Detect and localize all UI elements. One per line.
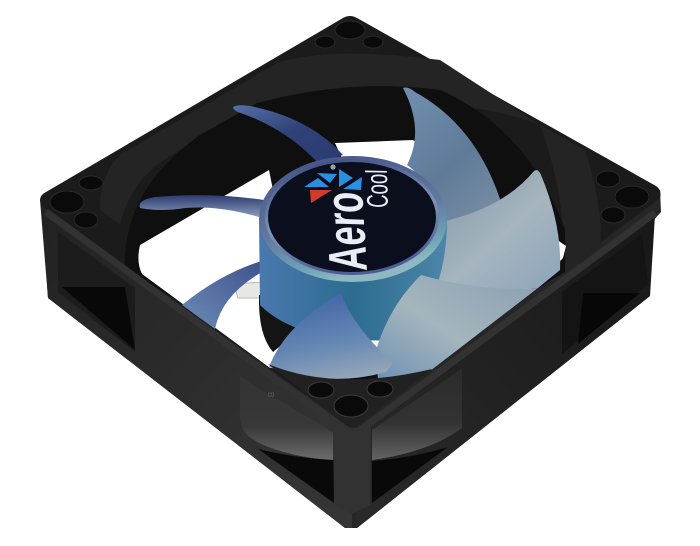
front-right side face	[357, 215, 655, 528]
registered mark	[330, 164, 336, 170]
brand name: Cool: Cool	[360, 169, 395, 208]
blades in front of hub	[269, 275, 538, 381]
hub side	[259, 219, 447, 341]
hub inner ring	[265, 159, 439, 275]
blade: top-left	[233, 105, 343, 162]
blade: right	[430, 170, 560, 290]
holes: right corner	[596, 171, 649, 223]
front-right lower recess	[372, 447, 448, 503]
blade: left	[140, 195, 264, 218]
motor base	[259, 290, 300, 352]
blade: bottom right	[376, 275, 538, 381]
brand name: Aero: Aero	[313, 191, 379, 271]
top scoop highlights	[100, 54, 601, 272]
left vent	[58, 232, 135, 352]
right vent	[562, 234, 648, 354]
holes: top corner	[315, 21, 383, 48]
front pillar	[333, 428, 371, 514]
white see-through opening	[138, 140, 566, 368]
moulded label: B	[266, 392, 275, 397]
blades	[140, 88, 560, 329]
logo triangles	[304, 169, 362, 203]
front-left lower scoop	[240, 376, 333, 461]
front-left side face	[42, 208, 353, 528]
holes: left corner	[50, 176, 103, 228]
front-right lower scoop	[372, 368, 462, 460]
front corner of top face	[268, 364, 432, 428]
holes: front corner	[308, 381, 393, 417]
frame: top face	[40, 16, 660, 426]
connector behind hub	[234, 282, 262, 298]
hub cap	[268, 162, 436, 272]
blade: top right	[403, 88, 505, 240]
inner wall of opening	[125, 86, 565, 400]
front-left lower recess	[258, 449, 334, 503]
hub outer ring	[259, 156, 447, 282]
front rim strips	[46, 212, 655, 435]
blade: front	[269, 293, 392, 379]
blade: lower left	[182, 258, 272, 329]
mounting holes	[50, 21, 649, 417]
hub	[259, 156, 447, 341]
